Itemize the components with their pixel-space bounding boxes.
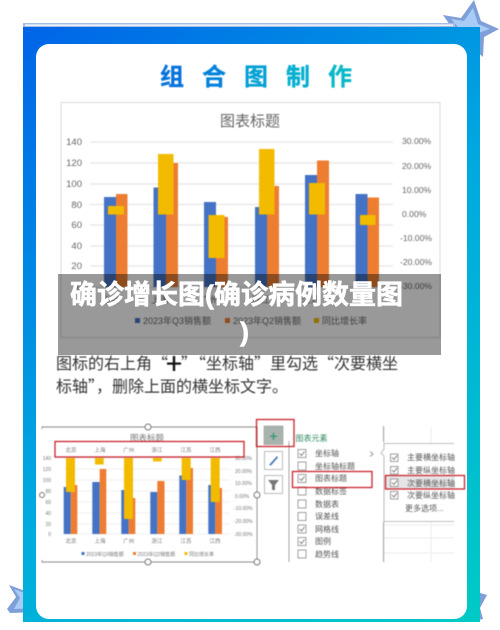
- filter button: [264, 476, 282, 494]
- chart: second chart screenshot: 浙江: [151, 537, 163, 545]
- title: [160, 64, 352, 91]
- chart: second chart screenshot: 北京: [65, 537, 77, 545]
- chart: second chart screenshot: 20: [45, 522, 51, 528]
- orange bars: [116, 160, 379, 287]
- chart elements menu screenshot: [256, 420, 464, 562]
- chart: second chart screenshot: 图表标题: [130, 433, 164, 443]
- chart: second chart screenshot: -10.00%: [234, 506, 253, 512]
- title: 制: [286, 64, 310, 91]
- chart: second chart screenshot: 100: [43, 478, 51, 484]
- yellow growth bars: [108, 149, 376, 258]
- submenu: 更多选项...: [405, 503, 444, 513]
- left axis labels: 60: [71, 220, 82, 231]
- chart: second chart screenshot: 2023年Q2销售额: [138, 551, 175, 558]
- title: 图: [244, 64, 268, 91]
- right axis labels: [400, 136, 432, 291]
- chart: second chart screenshot: 2023年Q3销售额: [86, 551, 124, 558]
- chart: second chart screenshot: 60: [45, 500, 51, 506]
- chart: second chart screenshot: -30.00%: [234, 532, 253, 538]
- legend: 2023年Q2销售额: [233, 315, 301, 326]
- right axis labels: 20.00%: [402, 161, 432, 171]
- right axis labels: 30.00%: [402, 136, 432, 146]
- chart: second chart screenshot: 上海: [94, 537, 106, 545]
- blue bars: [104, 175, 368, 287]
- checkbox list: [315, 448, 355, 559]
- chart: second chart screenshot: 10.00%: [235, 481, 253, 487]
- left axis labels: 80: [71, 200, 82, 211]
- submenu: 主要横坐标轴: [407, 452, 455, 462]
- chart: second chart screenshot: 广州: [123, 537, 134, 545]
- top axis labels: 浙江: [151, 446, 163, 454]
- right axis labels: 0.00%: [402, 209, 427, 219]
- red highlight: secondary axis option: [386, 476, 464, 489]
- checkbox list: 数据表: [315, 499, 339, 509]
- chart: second chart screenshot: -20.00%: [234, 519, 253, 525]
- checkbox list: 图例: [315, 536, 331, 546]
- chart: second chart screenshot: 120: [43, 467, 51, 473]
- chart: second chart screenshot: 140: [43, 456, 51, 462]
- chart: second chart screenshot: 江苏: [180, 537, 192, 545]
- left axis labels: 0: [77, 282, 82, 293]
- checkbox list: 数据标签: [315, 486, 347, 496]
- left axis labels: 40: [71, 241, 82, 252]
- checkbox list: 网格线: [315, 524, 339, 534]
- chart: second chart screenshot: 20.00%: [235, 469, 253, 475]
- overlay caption band: ): [240, 317, 249, 347]
- category labels: 广州: [201, 294, 219, 305]
- instruction text: “坐标轴”里勾选“次要横坐: [190, 350, 398, 374]
- category labels: 北京: [101, 294, 119, 305]
- legend: 同比增长率: [322, 315, 367, 326]
- chart: second chart screenshot: 0: [48, 532, 51, 538]
- background grid: [384, 427, 454, 562]
- left axis labels: 140: [66, 137, 82, 148]
- chart: second chart screenshot: 同比增长率: [189, 551, 214, 558]
- title: 作: [328, 64, 352, 91]
- right axis labels: -20.00%: [400, 257, 432, 267]
- right axis labels: -30.00%: [400, 281, 432, 291]
- submenu: 次要纵坐标轴: [407, 490, 455, 500]
- instruction text: 标轴”，删除上面的横坐标文字。: [56, 373, 288, 397]
- chart: second chart screenshot: 30.00%: [235, 456, 253, 462]
- frame top strip: [23, 23, 455, 27]
- left axis labels: [66, 137, 82, 293]
- checkbox list: 坐标轴标题: [315, 461, 355, 471]
- checkbox list: 趋势线: [315, 549, 339, 559]
- right axis labels: -10.00%: [400, 233, 432, 243]
- top axis labels: 上海: [94, 446, 106, 454]
- chart: second chart screenshot: 江西: [209, 538, 221, 545]
- plus button: +: [269, 428, 278, 444]
- red highlight: plus button: [256, 420, 294, 446]
- star: bottom right: [470, 590, 487, 622]
- instruction text: 图标的右上角“: [56, 350, 168, 374]
- instruction text: [56, 350, 398, 397]
- top axis labels: 广州: [123, 446, 134, 454]
- category labels: 江苏: [302, 294, 320, 305]
- right axis labels: 10.00%: [402, 185, 432, 195]
- menu heading: 图表元素: [296, 433, 328, 443]
- red highlight: top axis labels: [55, 442, 244, 457]
- top axis labels: 北京: [65, 446, 77, 454]
- top axis labels: [65, 446, 221, 454]
- chart: second chart screenshot: [40, 424, 260, 565]
- category labels: 上海: [151, 294, 169, 305]
- top axis labels: 江苏: [180, 446, 192, 454]
- white content panel: [36, 44, 467, 619]
- star: bottom left: [7, 585, 40, 613]
- checkbox list: 图表标题: [315, 473, 347, 483]
- title: 合: [202, 64, 226, 91]
- chart: second chart screenshot: 40: [45, 511, 51, 517]
- gridlines: [90, 142, 393, 287]
- star: top right: [443, 0, 499, 57]
- legend: [135, 315, 367, 326]
- overlay caption band: 确诊增长图(确诊病例数量图: [70, 280, 403, 310]
- left axis labels: 100: [66, 179, 82, 190]
- category labels: [101, 294, 370, 305]
- legend: 2023年Q3销售额: [143, 315, 211, 326]
- submenu: 主要纵坐标轴: [407, 465, 455, 475]
- left axis labels: 120: [66, 158, 82, 169]
- chart: second chart screenshot: 80: [45, 489, 51, 495]
- arrow chevron: [370, 452, 373, 456]
- instruction text: ”: [181, 350, 197, 374]
- chart: main combo chart: [61, 102, 440, 338]
- submenu: 次要横坐标轴: [407, 478, 455, 488]
- checkbox list: 误差线: [315, 511, 339, 521]
- chart: second chart screenshot: 0.00%: [235, 494, 250, 500]
- brush button: [264, 452, 282, 470]
- overlay caption band: [58, 274, 441, 355]
- chart title: 图表标题: [220, 113, 280, 130]
- selection frame: [42, 427, 257, 562]
- plus button: [264, 426, 283, 444]
- top axis labels: 江西: [209, 447, 221, 454]
- checkbox list: 坐标轴: [315, 448, 339, 458]
- category labels: 浙江: [252, 294, 270, 305]
- category labels: 江西: [352, 295, 370, 305]
- submenu: [381, 444, 464, 522]
- left axis labels: 20: [71, 261, 82, 272]
- title: 组: [160, 64, 184, 91]
- red highlight: chart title option: [292, 472, 372, 488]
